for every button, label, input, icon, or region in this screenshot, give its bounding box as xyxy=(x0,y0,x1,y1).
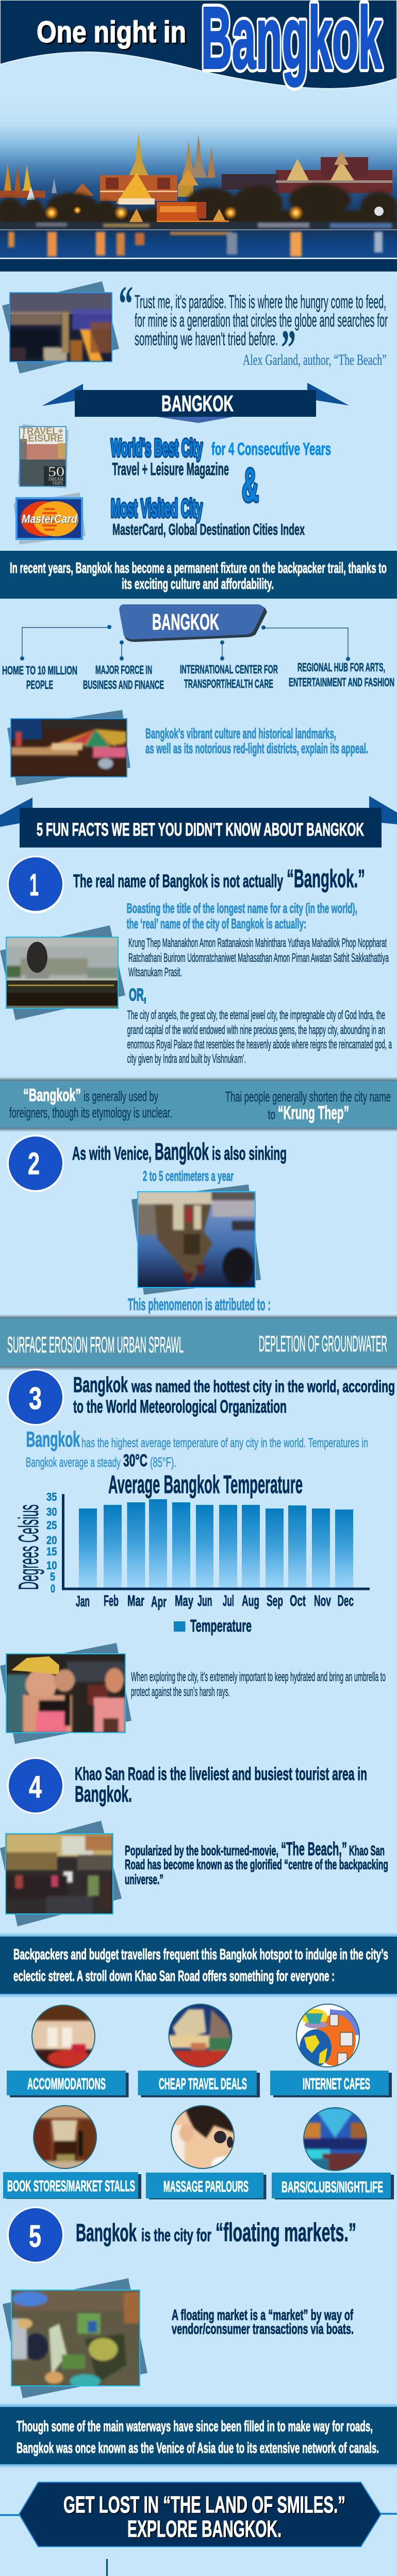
photo: square at night xyxy=(168,2003,233,2068)
label xyxy=(146,2173,266,2199)
fact 2 heading: is also sinking xyxy=(212,1143,287,1164)
fact 2 heading: As with Venice, xyxy=(72,1143,152,1164)
name used by foreigners: is generally used by xyxy=(84,1089,158,1104)
y axis ticks xyxy=(46,1490,57,1595)
call to action: EXPLORE BANGKOK. xyxy=(127,2516,282,2542)
trees xyxy=(0,183,397,227)
connectors xyxy=(22,628,348,659)
number badge 3 xyxy=(7,1369,64,1426)
closing quote mark: ” xyxy=(281,319,296,377)
translation: city given by Indra and built by Vishnukam’. xyxy=(127,1052,246,1066)
label: MASSAGE PARLOURS xyxy=(163,2178,249,2195)
opening quote mark: “ xyxy=(119,275,133,332)
name used by foreigners: foreigners, though its etymology is unclear. xyxy=(9,1105,172,1121)
label: population: HOME TO 10 MILLION xyxy=(2,664,77,677)
label: business: MAJOR FORCE IN xyxy=(95,663,152,676)
source: travel + leisure: Travel + Leisure Magazine xyxy=(112,460,229,479)
fact 4 xyxy=(0,1757,388,1926)
attribution line: This phenomenon is attributed to : xyxy=(128,1295,271,1314)
label: population: PEOPLE xyxy=(26,678,53,691)
offering: book stores xyxy=(3,2105,141,2199)
hydration text xyxy=(131,1670,386,1699)
photo: night market xyxy=(7,710,130,786)
badge: BANGKOK xyxy=(152,609,219,635)
label: transport xyxy=(180,663,278,690)
label: arts xyxy=(289,660,394,689)
thai name xyxy=(128,936,389,979)
panel: accolades: & xyxy=(242,459,259,512)
fact 3 heading xyxy=(73,1372,395,1417)
fact 3 text: 30°C xyxy=(123,1451,147,1470)
call to action: EXPLORE BANGKOK. xyxy=(128,2517,283,2543)
number badge 1 xyxy=(7,856,64,913)
photo: hot stone massage xyxy=(170,2105,237,2171)
sink rate: 2 to 5 centimeters a year xyxy=(143,1168,234,1184)
call to action xyxy=(0,2482,397,2547)
month labels: Jul xyxy=(223,1592,234,1609)
y axis ticks: 30 xyxy=(46,1505,57,1518)
offering: cheap travel deals xyxy=(138,2003,260,2097)
fact 2 heading xyxy=(72,1138,287,1165)
magazine cover: TRAVEL+ xyxy=(21,426,63,437)
panel: accolades xyxy=(13,424,331,545)
title: One night in: One night in xyxy=(37,15,186,49)
fact 5 heading: Bangkok xyxy=(76,2219,137,2247)
fact 3 heading: Bangkok xyxy=(73,1372,128,1397)
photo: woman with fan xyxy=(0,1643,131,1744)
fact 5 text xyxy=(172,2307,354,2337)
left palace xyxy=(0,169,198,205)
name used by foreigners xyxy=(9,1086,172,1121)
caption xyxy=(145,725,368,756)
month labels: Oct xyxy=(290,1592,306,1609)
offering: internet cafes xyxy=(270,2003,392,2097)
number badge 2: 2 xyxy=(28,1146,40,1181)
y axis ticks: 35 xyxy=(46,1490,57,1503)
band: names xyxy=(0,1077,397,1132)
band: something for everyone xyxy=(0,1933,397,1998)
fact 3 xyxy=(7,1369,395,1635)
offering: bars and clubs xyxy=(272,2107,394,2199)
panel: keep hydrated xyxy=(0,1643,386,1744)
translation xyxy=(127,1008,392,1066)
label: BOOK STORES/MARKET STALLS xyxy=(7,2178,135,2195)
fact 3 text: Bangkok xyxy=(26,1427,80,1451)
legend: Temperature xyxy=(190,1616,252,1635)
photo: bookshop xyxy=(32,2105,97,2170)
y axis ticks: 25 xyxy=(46,1519,57,1532)
magazine cover: DREAM xyxy=(48,477,63,482)
quote text xyxy=(135,291,388,349)
month labels xyxy=(76,1592,354,1611)
fact 3 text: Bangkok average a steady xyxy=(26,1454,121,1470)
photo: flooded temple reflection xyxy=(131,1184,261,1295)
panel: quote xyxy=(2,275,388,377)
fact 5 heading xyxy=(76,2218,356,2247)
photo: nightclub xyxy=(303,2107,368,2172)
mastercard logo xyxy=(13,493,86,545)
month labels: Dec xyxy=(337,1592,354,1609)
label: business: BUSINESS AND FINANCE xyxy=(83,678,164,691)
hero photo: Grand Palace at dusk xyxy=(0,98,397,259)
icon: globe and computers xyxy=(296,2003,360,2068)
mastercard logo: MasterCard xyxy=(22,513,78,526)
label: ACCOMMODATIONS xyxy=(27,2075,106,2093)
name used by foreigners: “Bangkok” xyxy=(23,1086,81,1105)
band: causes of sinking xyxy=(0,1314,397,1370)
header wave xyxy=(0,0,397,89)
y axis ticks: 20 xyxy=(46,1534,57,1547)
fact 4 heading xyxy=(75,1764,367,1807)
number badge 5: 5 xyxy=(29,2219,41,2253)
bar chart: average temperature xyxy=(12,1471,370,1635)
label xyxy=(7,2071,129,2097)
label: CHEAP TRAVEL DEALS xyxy=(159,2075,247,2093)
fact 4 heading: Bangkok. xyxy=(75,1782,132,1807)
offering: massage parlours xyxy=(146,2105,266,2199)
number badge 4 xyxy=(7,1757,64,1814)
fact 3 text xyxy=(26,1427,368,1470)
fact 3 text: (85°F). xyxy=(150,1454,176,1470)
fact 4 text: “The Beach,” xyxy=(281,1838,347,1859)
label: population xyxy=(2,664,77,691)
photo: monument xyxy=(0,925,125,1020)
number badge 2 xyxy=(7,1134,64,1192)
number badge 4: 4 xyxy=(29,1770,42,1804)
label xyxy=(138,2071,260,2097)
magazine cover: LEISURE xyxy=(22,433,63,444)
hydration text: protect against the sun’s harsh rays. xyxy=(131,1685,230,1699)
label xyxy=(3,2172,141,2199)
month labels: Apr xyxy=(151,1594,167,1611)
month labels: May xyxy=(175,1592,193,1609)
river with reflections xyxy=(0,230,397,258)
panel: accolades: Most Visited City xyxy=(111,495,203,522)
offering: accommodations xyxy=(7,2004,129,2097)
fact 1 intro xyxy=(127,901,357,931)
month labels: Jan xyxy=(76,1593,90,1610)
axes xyxy=(63,1494,370,1589)
skyline silhouette xyxy=(0,2559,397,2576)
number badge 3: 3 xyxy=(29,1381,42,1416)
ribbon heading: 5 fun facts xyxy=(0,796,397,848)
photo: Khao San Road xyxy=(0,1821,122,1926)
month labels: Mar xyxy=(127,1592,144,1609)
lower pavilion xyxy=(129,202,229,224)
fact 1 heading xyxy=(73,865,365,893)
fact 4 text xyxy=(125,1838,388,1887)
month labels: Sep xyxy=(267,1592,283,1609)
magazine cover xyxy=(18,424,69,488)
mastercard logo: MasterCard xyxy=(22,512,78,526)
magazine cover: TRIPS xyxy=(52,481,63,486)
month labels: Jun xyxy=(197,1592,212,1609)
number badge 1: 1 xyxy=(29,868,39,902)
fact 1 xyxy=(0,856,392,1066)
title: One night in: One night in xyxy=(38,17,188,50)
label: transport: TRANSPORT/HEALTH CARE xyxy=(184,677,273,690)
y axis ticks: 0 xyxy=(51,1582,55,1595)
right hall roofs xyxy=(222,150,392,193)
diagram: Bangkok roles xyxy=(2,604,394,691)
badge xyxy=(119,604,267,642)
band: venice of asia xyxy=(0,2403,397,2468)
panel: vibrant culture xyxy=(7,710,368,786)
panel: accolades: World's Best City xyxy=(111,434,203,461)
month labels: Feb xyxy=(104,1592,119,1609)
month labels: Aug xyxy=(242,1592,259,1609)
quote photo: city at night xyxy=(2,281,119,374)
footer with skyline xyxy=(0,2559,397,2576)
thai name: Witsanukam Prasit. xyxy=(128,965,182,979)
y axis ticks: 15 xyxy=(46,1545,57,1558)
y axis ticks: 5 xyxy=(50,1570,55,1583)
label: business xyxy=(83,663,164,691)
OR: OR, xyxy=(129,985,146,1004)
spires xyxy=(4,132,216,193)
fact 4 text: universe.” xyxy=(125,1872,163,1887)
fact 4 text: Popularized by the book-turned-movie, xyxy=(125,1843,278,1858)
name used by thai people: to xyxy=(268,1107,275,1122)
bars xyxy=(79,1499,353,1588)
photo: floating market xyxy=(3,2278,147,2398)
shoreline xyxy=(0,222,397,229)
label xyxy=(270,2071,392,2097)
ribbon heading: BANGKOK: BANGKOK xyxy=(161,391,234,416)
band: backpacker trail: its exciting culture and affordability. xyxy=(122,576,274,592)
label xyxy=(272,2173,394,2199)
name used by thai people xyxy=(225,1089,391,1123)
band: backpacker trail xyxy=(0,551,397,599)
navy divider band xyxy=(0,259,397,272)
y axis ticks: 10 xyxy=(46,1559,57,1572)
fact 5 heading: is the city for xyxy=(141,2226,211,2245)
fact 2 heading: Bangkok xyxy=(155,1138,209,1165)
bar chart: average temperature: Degrees Celsius xyxy=(12,1504,44,1590)
month labels: Nov xyxy=(314,1592,331,1609)
number badge 5 xyxy=(7,2207,64,2263)
name used by thai people: “Krung Thep” xyxy=(278,1102,349,1123)
label: transport: INTERNATIONAL CENTER FOR xyxy=(180,663,278,676)
street lights xyxy=(44,206,59,220)
photo: room xyxy=(31,2004,96,2069)
fact 2 xyxy=(7,1134,287,1314)
magazine cover: 50 xyxy=(48,464,64,479)
fact 5 xyxy=(3,2207,356,2398)
legend xyxy=(174,1616,252,1635)
ribbon heading: BANGKOK xyxy=(42,383,349,423)
